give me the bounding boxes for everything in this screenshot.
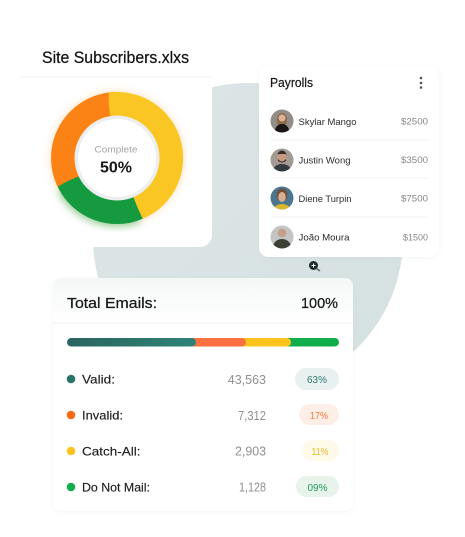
total value: 100% (301, 295, 338, 312)
row: Diene Turpin: $7500 (401, 194, 428, 204)
row: do not mail: Do Not Mail: (82, 480, 150, 494)
icon: zoom magnifier (309, 261, 320, 271)
row: Skylar Mango: $2500 (401, 116, 428, 128)
row: Diene Turpin: Diene Turpin (298, 194, 352, 205)
row: Justin Wong (270, 148, 428, 172)
row: invalid: 17% (310, 411, 328, 422)
row: João Moura (270, 226, 428, 248)
donut chart (51, 92, 183, 224)
background circle (93, 83, 403, 393)
heading: site subscribers: Site Subscribers.xlxs (42, 49, 189, 67)
panel: site subscribers (0, 0, 212, 247)
row: do not mail: 1,128 (239, 480, 266, 494)
heading: total emails: Total Emails: (67, 295, 157, 312)
panel: payrolls (259, 76, 428, 257)
row: Skylar Mango (270, 110, 428, 132)
row: catch-all: 2,903 (235, 444, 266, 458)
row: valid (67, 368, 339, 390)
donut label: Complete (94, 144, 138, 156)
row: valid: Valid: (82, 372, 115, 386)
row: do not mail: 09% (307, 483, 328, 494)
icon: menu dots (420, 77, 422, 89)
row: do not mail (67, 476, 339, 497)
row: catch-all: Catch-All: (82, 444, 140, 458)
donut value: 50% (100, 160, 132, 176)
heading: payrolls: Payrolls (270, 76, 313, 90)
row: catch-all: 11% (312, 447, 329, 458)
row: João Moura: João Moura (298, 232, 350, 244)
row: valid: 43,563 (228, 373, 266, 387)
row: invalid: 7,312 (238, 409, 266, 423)
row: valid: 63% (307, 375, 327, 386)
row: invalid (67, 404, 339, 425)
row: invalid: Invalid: (82, 408, 123, 422)
panel: total emails (53, 278, 353, 511)
row: catch-all (67, 440, 339, 461)
row: Justin Wong: $3500 (401, 155, 428, 166)
row: Justin Wong: Justin Wong (298, 156, 350, 166)
row: Skylar Mango: Skylar Mango (298, 117, 356, 128)
row: João Moura: $1500 (403, 232, 428, 244)
stacked bar (67, 338, 339, 346)
row: Diene Turpin (270, 186, 428, 210)
